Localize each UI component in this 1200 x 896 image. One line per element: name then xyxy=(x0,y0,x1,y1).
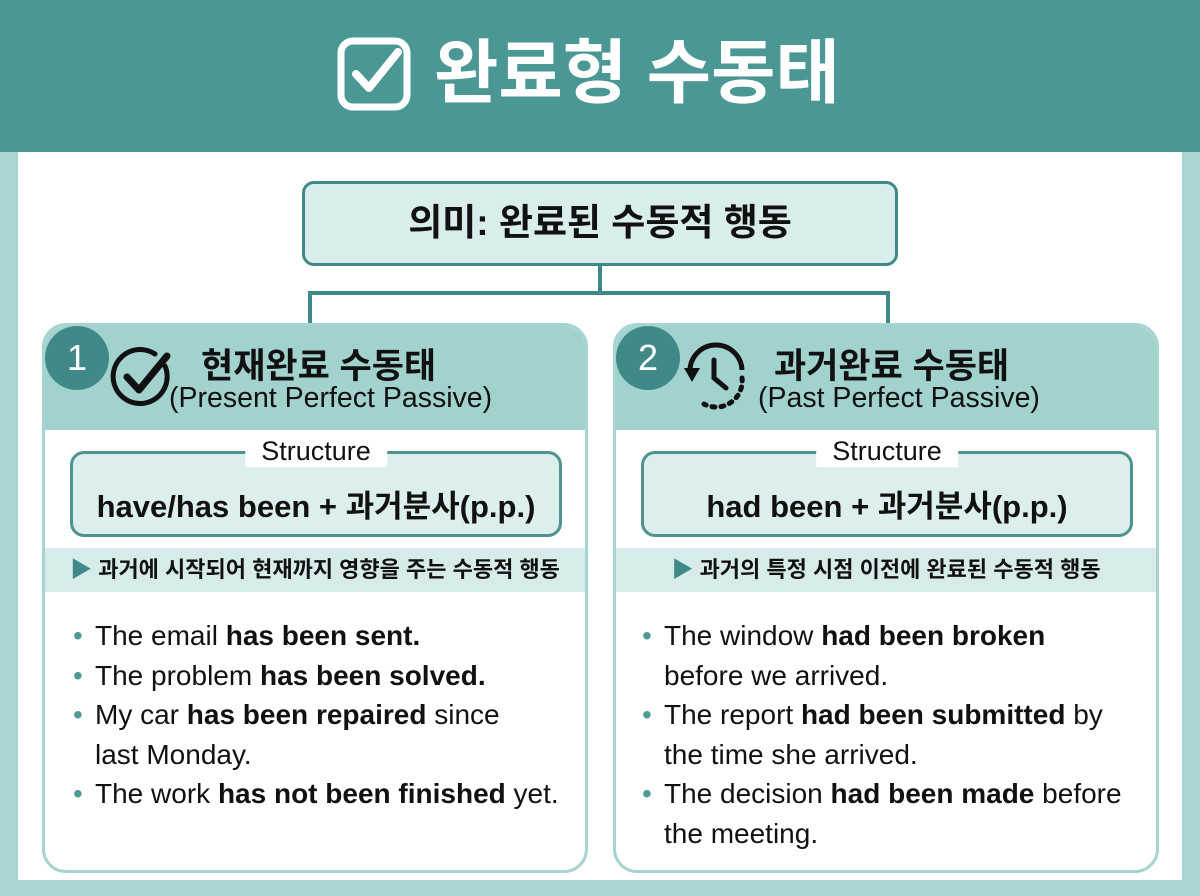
panel: present perfect passive: (Present Perfect Passive) xyxy=(169,382,492,414)
panel: present perfect passive xyxy=(42,323,588,873)
structure box: Structure xyxy=(261,436,371,466)
number badge 2: 2 xyxy=(638,337,658,378)
examples: The window had been broken xyxy=(664,620,1045,651)
heading: 과거완료 수동태 xyxy=(774,347,1009,386)
number badge 2 xyxy=(616,326,680,390)
examples: The work has not been finished yet. xyxy=(95,778,559,809)
header band xyxy=(0,0,1200,152)
number badge 1 xyxy=(45,326,109,390)
description xyxy=(45,548,585,592)
examples: before we arrived. xyxy=(664,660,888,690)
icon: checkbox xyxy=(338,38,410,110)
examples: The decision had been made before xyxy=(664,778,1122,809)
description: ▶ 과거에 시작되어 현재까지 영향을 주는 수동적 행동 xyxy=(70,557,560,582)
structure box: Structure xyxy=(832,436,942,466)
white background area xyxy=(18,152,1182,880)
number badge 1: 1 xyxy=(67,337,87,378)
examples: The report had been submitted by xyxy=(664,699,1103,730)
meaning box xyxy=(302,181,898,266)
description xyxy=(616,548,1156,592)
meaning box: 의미: 완료된 수동적 행동 xyxy=(408,202,792,243)
examples xyxy=(643,620,1122,849)
examples xyxy=(74,620,559,809)
heading: 현재완료 수동태 xyxy=(201,347,436,386)
examples: The problem has been solved. xyxy=(95,660,486,690)
structure box: have/has been + 과거분사(p.p.) xyxy=(97,489,535,524)
panel header xyxy=(45,326,585,430)
icon: check circle xyxy=(110,347,170,406)
structure box: had been + 과거분사(p.p.) xyxy=(706,489,1068,524)
structure box xyxy=(70,451,562,537)
panel: past perfect passive xyxy=(613,323,1159,873)
description: ▶ 과거의 특정 시점 이전에 완료된 수동적 행동 xyxy=(671,557,1101,582)
title: 완료형 수동태 xyxy=(434,34,840,112)
structure box xyxy=(641,451,1133,537)
icon: clock with arrow xyxy=(684,342,745,410)
examples: the time she arrived. xyxy=(664,738,918,770)
connector lines xyxy=(308,266,890,323)
panel header xyxy=(616,326,1156,430)
panel: past perfect passive: (Past Perfect Passive) xyxy=(758,382,1040,414)
examples: the meeting. xyxy=(664,818,818,848)
examples: last Monday. xyxy=(95,738,252,770)
examples: My car has been repaired since xyxy=(95,699,500,730)
examples: The email has been sent. xyxy=(95,620,420,651)
